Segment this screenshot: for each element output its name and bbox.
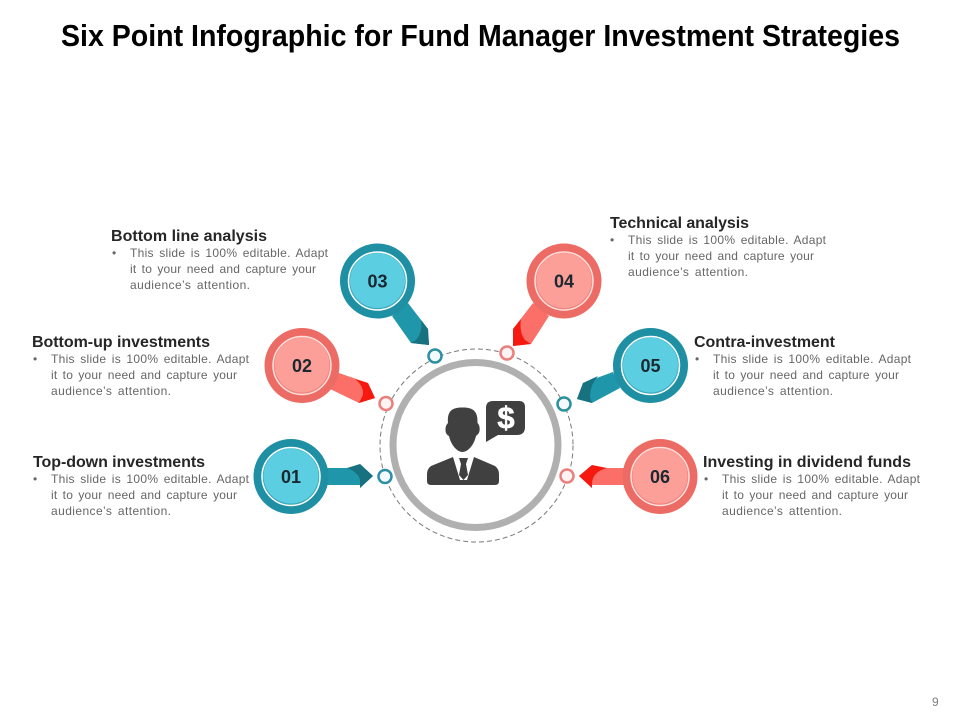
text block: Technical analysis [610,215,827,279]
point 05: marker and arrow [558,328,688,410]
text block: Bottom-up investments: Bottom-up investments [32,334,210,351]
text block: Bottom-up investments: • [33,352,37,366]
point 04: marker and arrow: 04 [554,272,574,292]
text block: Contra-investment: • [695,352,699,366]
text block: Technical analysis: • [610,233,614,247]
text block: Investing in dividend funds: • [704,472,708,486]
text block: Contra-investment [694,334,912,398]
text block: Investing in dividend funds: audience’s attention. [722,504,842,518]
text block: Investing in dividend funds [703,454,921,518]
text block: Bottom-up investments [32,334,250,398]
text block: Bottom line analysis: audience’s attention. [130,278,250,292]
title: Six Point Infographic for Fund Manager Investment Strategies [61,19,900,53]
text block: Top-down investments: • [33,472,37,486]
text block: Technical analysis: Technical analysis [610,215,749,232]
text block: Contra-investment: it to your need and capture your [713,368,899,382]
point 05: marker and arrow: 05 [640,356,661,376]
dashed orbit ring [380,349,573,542]
point 02: marker and arrow: 02 [292,356,312,376]
text block: Top-down investments: it to your need and capture your [51,488,237,502]
text block: Bottom line analysis: This slide is 100% editable. Adapt [130,246,329,260]
text block: Contra-investment: This slide is 100% editable. Adapt [713,352,912,366]
text block: Top-down investments [33,454,250,518]
icon: businessman with dollar speech bubble: $ [497,400,515,435]
text block: Investing in dividend funds: it to your need and capture your [722,488,908,502]
point 03: marker and arrow: 03 [367,272,388,292]
text block: Bottom-up investments: audience’s attention. [51,384,171,398]
text block: Technical analysis: it to your need and capture your [628,249,814,263]
text block: Top-down investments: Top-down investments [33,454,205,471]
text block: Technical analysis: audience’s attention. [628,265,748,279]
point 01: marker and arrow: 01 [281,467,301,487]
text block: Top-down investments: This slide is 100% editable. Adapt [51,472,250,486]
point 02: marker and arrow [264,328,392,410]
icon: businessman with dollar speech bubble [427,400,525,485]
central grey ring [393,362,558,528]
point 04: marker and arrow [500,244,602,360]
text block: Technical analysis: This slide is 100% editable. Adapt [628,233,827,247]
text block: Investing in dividend funds: Investing in dividend funds [703,454,911,471]
text block: Bottom line analysis: Bottom line analysis [111,228,267,245]
text block: Bottom line analysis: • [112,246,116,260]
text block: Top-down investments: audience’s attention. [51,504,171,518]
point 03: marker and arrow [340,244,442,362]
text block: Contra-investment: audience’s attention. [713,384,833,398]
text block: Bottom line analysis [111,228,329,292]
point 01: marker and arrow [254,439,392,514]
text block: Bottom-up investments: This slide is 100% editable. Adapt [51,352,250,366]
text block: Bottom line analysis: it to your need and capture your [130,262,316,276]
text block: Bottom-up investments: it to your need and capture your [51,368,237,382]
page number: 9 [932,695,939,709]
point 06: marker and arrow [560,439,698,514]
point 06: marker and arrow: 06 [650,467,670,487]
text block: Contra-investment: Contra-investment [694,334,836,351]
text block: Investing in dividend funds: This slide is 100% editable. Adapt [722,472,921,486]
